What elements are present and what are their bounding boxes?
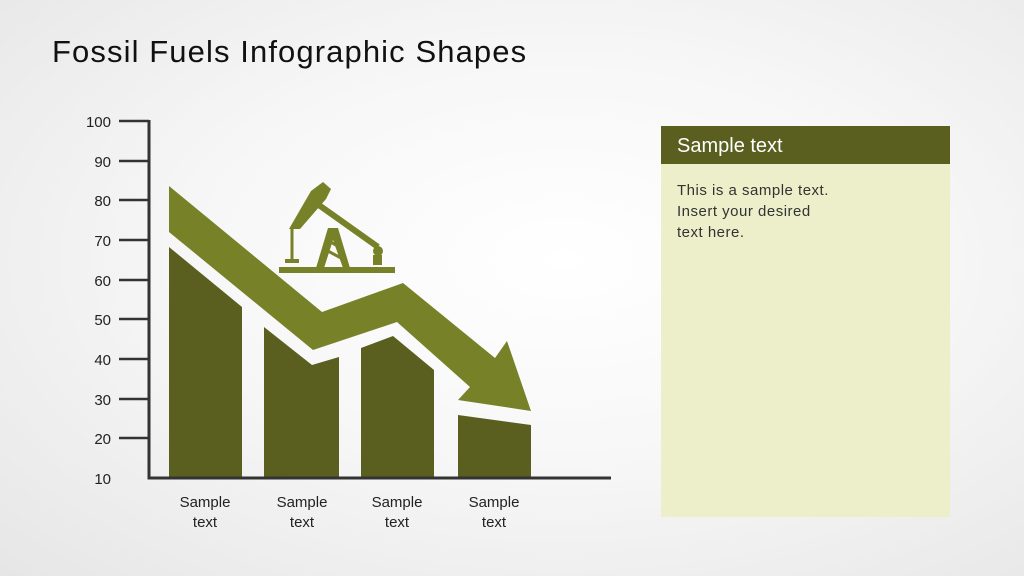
title: Fossil Fuels Infographic Shapes bbox=[52, 34, 527, 69]
x labels: Sample bbox=[372, 494, 422, 511]
y axis labels: 60 bbox=[94, 273, 111, 290]
panel body text: This is a sample text. bbox=[677, 182, 829, 199]
x labels: Sample bbox=[277, 494, 327, 511]
x labels: text bbox=[290, 514, 315, 531]
x labels: Sample bbox=[469, 494, 519, 511]
y axis labels: 80 bbox=[94, 193, 111, 210]
panel body text: Insert your desired bbox=[677, 203, 811, 220]
x labels: text bbox=[482, 514, 507, 531]
panel: text box bbox=[661, 126, 950, 517]
panel header: Sample text bbox=[677, 135, 783, 157]
icon: pump jack bbox=[279, 182, 395, 273]
y axis labels: 50 bbox=[94, 312, 111, 329]
x labels bbox=[180, 494, 519, 531]
panel body text: text here. bbox=[677, 224, 745, 241]
y axis labels: 10 bbox=[94, 471, 111, 488]
x labels: Sample bbox=[180, 494, 230, 511]
y axis labels: 90 bbox=[94, 154, 111, 171]
bars bbox=[169, 247, 531, 477]
y axis labels: 100 bbox=[86, 114, 111, 131]
y axis labels: 40 bbox=[94, 352, 111, 369]
x labels: text bbox=[385, 514, 410, 531]
y axis labels bbox=[86, 114, 111, 488]
panel body text bbox=[677, 182, 829, 241]
arrow bbox=[169, 186, 531, 411]
panel header bbox=[661, 126, 950, 164]
axes bbox=[119, 120, 611, 478]
y axis labels: 70 bbox=[94, 233, 111, 250]
x labels: text bbox=[193, 514, 218, 531]
y axis labels: 30 bbox=[94, 392, 111, 409]
y axis labels: 20 bbox=[94, 431, 111, 448]
